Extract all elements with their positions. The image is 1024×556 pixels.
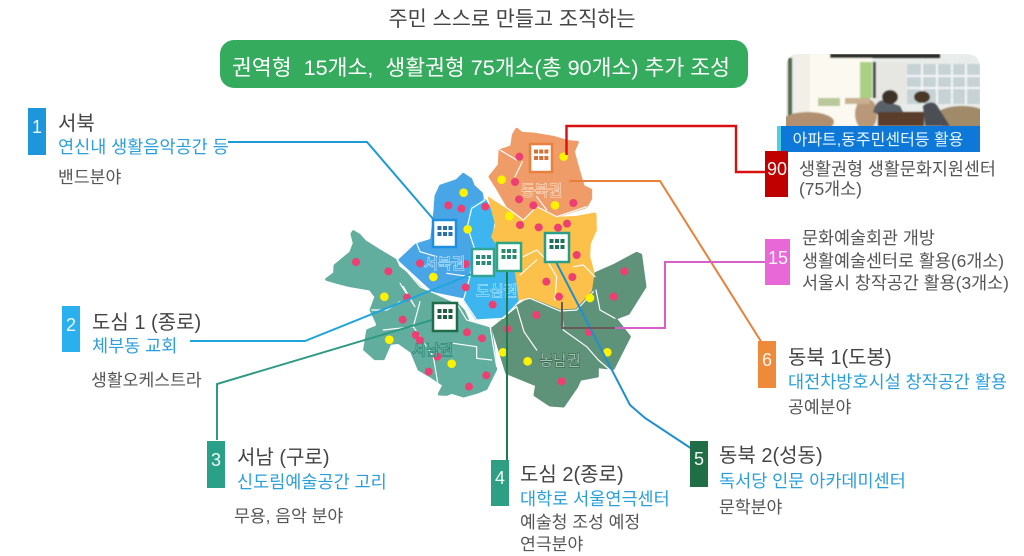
region labels: 서남권 — [412, 342, 453, 359]
callout: 6 동북 1: 공예분야 — [788, 397, 851, 417]
callout: 1 서북: 연신내 생활음악공간 등 — [58, 137, 229, 157]
callout: 4 도심 2: 4 — [495, 468, 505, 488]
region: 동북권 yellow — [489, 197, 595, 309]
icon: 도심 1 building — [472, 249, 494, 276]
callout: 3 서남: 3 — [211, 450, 221, 470]
line: 서남 — [217, 320, 432, 440]
callout: 6 동북 1 — [758, 341, 1007, 417]
photo caption bar — [777, 126, 980, 152]
callout: 90: (75개소) — [799, 179, 862, 199]
line: 동북 2 — [555, 260, 692, 449]
subtitle heading: 주민 스스로 만들고 조직하는 — [389, 8, 635, 31]
callout: 90: 생활권형 생활문화지원센터 — [799, 159, 996, 179]
callout: 5 동북 2: 독서당 인문 아카데미센터 — [719, 471, 906, 491]
callout: 15: 문화예술회관 개방 — [802, 228, 935, 248]
building icons — [433, 144, 569, 331]
callout: 6 동북 1: 동북 1(도봉) — [788, 347, 892, 369]
region: 서남권 — [327, 232, 496, 396]
callout: 15: 생활예술센터로 활용(6개소) — [802, 251, 1004, 271]
region labels: 서북권 — [424, 256, 465, 273]
callout: 5 동북 2: 문학분야 — [719, 497, 782, 517]
line: 90 — [566, 126, 765, 172]
pins: community facilities — [352, 152, 628, 391]
photo caption bar: 아파트,동주민센터등 활용 — [793, 131, 963, 149]
callout: 15: 서울시 창작공간 활용(3개소) — [802, 273, 1009, 293]
callout: 5 동북 2 — [690, 441, 906, 517]
callout: 5 동북 2: 5 — [694, 449, 704, 469]
line: 서북 — [228, 142, 434, 220]
icon: 서남 building — [433, 303, 457, 331]
icon: 동북 2 building — [545, 233, 569, 262]
callout: 3 서남: 신도림예술공간 고리 — [237, 472, 387, 492]
green banner: 권역형 15개소, 생활권형 75개소(총 90개소) 추가 조성 — [232, 55, 730, 80]
callout: 4 도심 2 — [491, 460, 670, 554]
callout: 4 도심 2: 연극분야 — [520, 534, 583, 554]
callout: 1 서북 — [28, 108, 229, 187]
callout: 1 서북: 서북 — [58, 112, 95, 135]
callout: 2 도심 1 — [62, 306, 202, 390]
callout: 4 도심 2: 예술청 조성 예정 — [520, 512, 640, 532]
callout: 90 — [765, 151, 996, 199]
region: 도심권 — [464, 201, 519, 319]
callout: 2 도심 1: 생활오케스트라 — [91, 370, 202, 390]
leader lines — [190, 126, 765, 461]
callout: 6 동북 1: 6 — [762, 350, 772, 370]
map of Seoul — [327, 129, 645, 406]
line: 15 over map — [562, 302, 615, 328]
icon: 도심 2 building — [497, 243, 521, 271]
line: 도심 1 — [190, 274, 472, 341]
callout: 3 서남 — [207, 441, 387, 526]
callout: 1 서북: 밴드분야 — [58, 167, 121, 187]
region: 서북권 — [400, 174, 482, 297]
line: 도심 2 — [506, 270, 508, 461]
icon: 동북 1 building — [530, 144, 552, 172]
photo panel — [786, 54, 980, 126]
line: 동북 1 — [569, 181, 762, 343]
callout: 3 서남: 서남 (구로) — [237, 446, 329, 469]
callout: 15 — [765, 228, 1009, 293]
region: 동남권 — [493, 253, 645, 406]
callout: 2 도심 1: 체부동 교회 — [92, 336, 177, 356]
region: 동북권 orange — [490, 129, 591, 219]
callout: 4 도심 2: 대학로 서울연극센터 — [520, 489, 670, 509]
callout: 5 동북 2: 동북 2(성동) — [719, 444, 823, 467]
callout: 4 도심 2: 도심 2(종로) — [520, 463, 624, 486]
callout: 6 동북 1: 대전차방호시설 창작공간 활용 — [788, 372, 1007, 392]
district boundaries — [372, 150, 615, 387]
green banner — [220, 40, 748, 88]
callout: 1 서북: 1 — [32, 117, 42, 137]
region labels: 동남권 — [539, 353, 581, 370]
callout: 15: 15 — [768, 248, 788, 268]
callout: 2 도심 1: 2 — [66, 315, 76, 335]
region labels: 동북권 — [521, 182, 562, 199]
callout: 3 서남: 무용, 음악 분야 — [234, 506, 343, 526]
region labels: 도심권 — [476, 283, 517, 300]
icon: 서북 building — [433, 220, 456, 247]
line: 15 — [615, 262, 765, 328]
callout: 2 도심 1: 도심 1 (종로) — [92, 311, 201, 334]
callout: 90: 90 — [767, 159, 787, 179]
region labels — [412, 182, 581, 370]
